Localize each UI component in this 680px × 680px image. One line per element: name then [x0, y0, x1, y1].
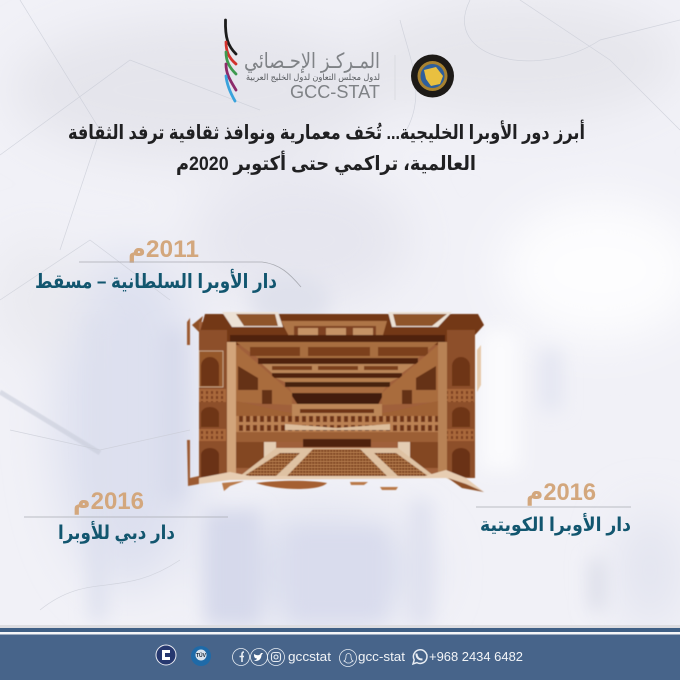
- lower balcony: [236, 432, 438, 442]
- icon: TUV seal: TÜV: [196, 652, 207, 659]
- decorative diagonal: [0, 392, 100, 453]
- illustration: opera house interior: [187, 312, 484, 492]
- floor stains: [199, 470, 484, 492]
- central ceiling coffer: [281, 321, 387, 342]
- inner side walls: [236, 345, 292, 405]
- left wall: [199, 330, 227, 478]
- callout: Kuwait Opera 2016: [476, 479, 631, 536]
- name: دار الأوبرا الكويتية: [480, 513, 631, 536]
- logo text: Arabic subtitle: لدول مجلس التعاون لدول الخليج العربية: [246, 72, 380, 82]
- callout: Royal Opera House Muscat 2011: [35, 236, 301, 293]
- year 2016: 2016م: [526, 479, 596, 506]
- year 2016: 2016م: [73, 488, 144, 515]
- boxes between balconies: [236, 416, 438, 433]
- logo: GCC-STAT: [225, 20, 454, 102]
- icon: coloured ribbon: [225, 20, 236, 101]
- icon: GCC emblem: [411, 54, 454, 98]
- title: أبرز دور الأوبرا الخليجية... تُحَف معمارية ونوافذ ثقافية ترفد الثقافة: [68, 119, 585, 144]
- text: phone: +968 2434 6482: [429, 649, 523, 664]
- text: gccstat: gccstat: [288, 649, 331, 664]
- ceiling beams and coffers: [230, 335, 445, 342]
- seats: [240, 448, 434, 476]
- logo text: GCC-STAT: GCC-STAT: [290, 82, 380, 102]
- outer ceiling: [199, 314, 484, 345]
- title: العالمية، تراكمي حتى أكتوبر 2020م: [176, 151, 476, 175]
- upper balcony: [236, 401, 438, 428]
- text: gcc-stat: gcc-stat: [358, 649, 405, 664]
- name: دار الأوبرا السلطانية – مسقط: [35, 268, 277, 293]
- callout: Dubai Opera 2016: [24, 488, 228, 544]
- year 2011: 2011م: [128, 236, 199, 263]
- title: [68, 119, 585, 175]
- logo text: Arabic name: المـركـز الإحـصائي: [244, 50, 380, 73]
- rough paint edges: [187, 318, 199, 486]
- icons: social media: [232, 648, 427, 666]
- footer bar: [0, 625, 680, 680]
- icon: certification seal: [156, 645, 176, 665]
- icon: TUV seal: [191, 646, 211, 666]
- name: دار دبي للأوبرا: [58, 521, 175, 544]
- columns: [227, 342, 236, 478]
- lower side boxes: [236, 442, 268, 468]
- right wall: [447, 330, 475, 478]
